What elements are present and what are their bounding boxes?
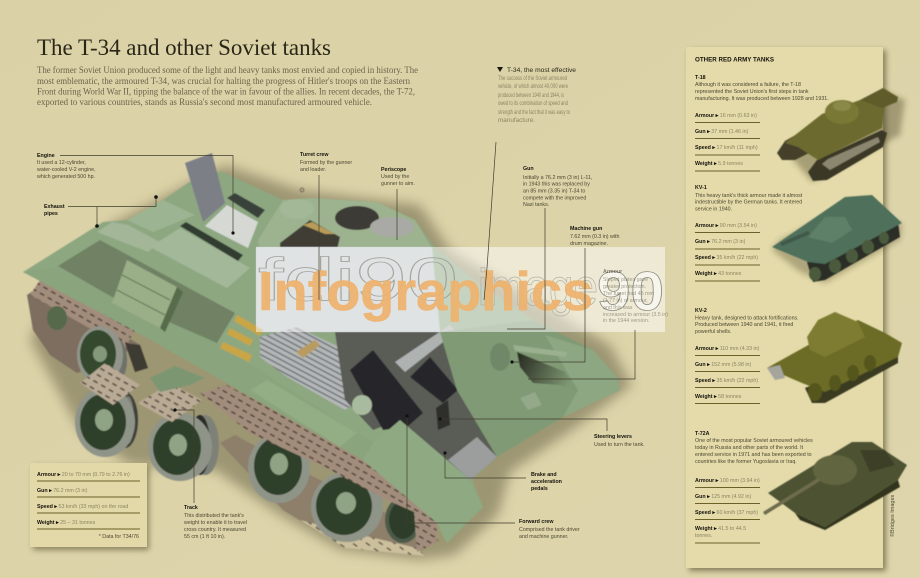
label: exhaust pipes: Exhaust <box>44 204 65 210</box>
label: armour <box>603 269 668 324</box>
panel: T-34 specifications: Speed ▸ 53 km/h (33 mph) on the road <box>37 504 128 510</box>
label: track <box>173 408 247 540</box>
callout: T-34 most effective <box>484 67 576 300</box>
label: machine gun: 7.62 mm (0.3 in) with <box>570 234 620 240</box>
T-72A specs: Speed ▸ 60 km/h (37 mph) <box>695 510 758 516</box>
glacis shade <box>517 352 578 392</box>
T-72A specs: today in Russia and other parts of the world. It <box>695 445 804 451</box>
label: brake and acceleration pedals: Brake and <box>531 472 557 478</box>
T-18 specs: Armour ▸ 16 mm (0.63 in) <box>695 113 757 119</box>
engine deck centre <box>150 228 250 288</box>
gold plate <box>296 340 320 358</box>
T-72A specs <box>695 431 813 543</box>
seat <box>350 350 423 430</box>
upper track <box>200 385 437 552</box>
label: track: This distributed the tank's <box>184 513 244 519</box>
T-18 specs: Although it was considered a failure, the T-18 <box>695 82 801 88</box>
label: gun: Initially a 76.2 mm (3 in) L-11, <box>523 175 592 181</box>
wheel 3 <box>148 413 219 481</box>
turret interior <box>256 247 440 332</box>
T-18 specs: Gun ▸ 37 mm (1.46 in) <box>695 129 749 135</box>
label: machine gun <box>510 226 620 364</box>
label: gun: compete with the improved <box>523 196 586 202</box>
T-18 specs <box>695 75 829 171</box>
T-18 specs: Weight ▸ 5.9 tonnes <box>695 161 743 167</box>
label: machine gun: drum magazine. <box>570 241 608 247</box>
engine deck rear <box>127 200 195 232</box>
silver cylinders <box>448 437 497 480</box>
KV-2 specs <box>695 308 799 404</box>
intro text: most emblematic, the armoured T-34, was crucial for halting the progress of Hitler's troops on the Eastern <box>37 76 410 87</box>
glacis <box>440 320 620 457</box>
credit: ©Bridges Images <box>889 494 896 537</box>
label: engine: It used a 12-cylinder, <box>37 160 86 166</box>
label: armour: in the 1944 version. <box>603 318 649 324</box>
turret opening <box>280 220 340 250</box>
KV-2 specs: Speed ▸ 35 km/h (22 mph) <box>695 378 758 384</box>
leader: armour <box>528 330 635 379</box>
main tank illustration: T-34 cutaway <box>23 153 632 560</box>
label: engine: water-cooled V-2 engine, <box>37 167 96 173</box>
label: steering levers: Used to turn the tank. <box>594 442 645 448</box>
label: brake and acceleration pedals: acceleration <box>531 479 562 485</box>
T-72A specs: Gun ▸ 125 mm (4.92 in) <box>695 494 751 500</box>
KV-1 specs: service in 1940. <box>695 206 732 212</box>
label: engine <box>37 153 235 235</box>
marker triangle <box>497 67 503 72</box>
label: brake and acceleration pedals <box>443 451 562 492</box>
KV-2 tank illustration <box>767 312 902 403</box>
T-72A tank illustration <box>763 442 907 530</box>
label: turret crew: and loader. <box>300 167 326 173</box>
callout body: The success of the Soviet armoured <box>498 76 567 82</box>
dome <box>280 199 314 219</box>
callout body: manufacture. <box>498 118 535 124</box>
label: armour: (1.77 in) of armour, <box>603 298 648 304</box>
label: track: cross country. It measured <box>184 527 246 533</box>
KV-1 specs <box>695 185 803 281</box>
intro text: The former Soviet Union produced some of the light and heavy tanks most envied and copied in history. The <box>37 65 418 76</box>
hull silhouette <box>23 172 620 543</box>
KV-2 specs: Armour ▸ 110 mm (4.33 in) <box>695 346 760 352</box>
watermark text: 90 <box>597 260 664 322</box>
label: periscope <box>381 167 415 240</box>
watermark text: fdi90 <box>258 246 458 313</box>
callout body: vehicle, of which almost 40,000 were <box>498 84 568 90</box>
callout body <box>498 76 570 124</box>
T-72A specs: One of the most popular Soviet armoured vehicles <box>695 438 813 444</box>
KV-2 specs: KV-2 <box>695 308 707 314</box>
KV-1 specs: KV-1 <box>695 185 707 191</box>
KV-1 specs: Gun ▸ 76.2 mm (3 in) <box>695 239 746 245</box>
KV-1 specs: indestructible by the German tanks. It entered <box>695 200 802 206</box>
label: turret crew: Formed by the gunner <box>300 160 352 166</box>
side plate <box>58 240 235 343</box>
label: brake and acceleration pedals: pedals <box>531 486 548 492</box>
label: gun: Gun <box>523 166 534 172</box>
label: turret crew: Turret crew <box>300 152 329 158</box>
rounded rear cover <box>97 222 160 252</box>
label: engine: Engine <box>37 153 55 159</box>
label: engine: which generated 500 hp. <box>37 174 95 180</box>
label: exhaust pipes <box>44 195 158 228</box>
ground shadow <box>30 165 632 560</box>
steering levers <box>436 400 450 430</box>
wheel 5 <box>311 472 383 542</box>
label: machine gun: Machine gun <box>570 226 602 232</box>
open hatch <box>185 153 225 222</box>
T-18 specs: T-18 <box>695 75 706 81</box>
panel: T-34 specifications: Armour ▸ 20 to 70 mm (0.79 to 2.76 in) <box>37 472 130 478</box>
intro text: Front during World War II, tipping the balance of the war in favour of the allies. In recent decades, the T-72, <box>37 86 415 98</box>
KV-2 specs: Produced between 1940 and 1941, it fired <box>695 322 793 328</box>
label: armour: increased to armour (3.5 in) <box>603 312 668 318</box>
callout body: strength and the fact that it was easy to <box>498 110 570 116</box>
turret top <box>258 198 433 250</box>
KV-2 specs: Heavy tank, designed to attack fortifications. <box>695 316 799 322</box>
T-72A specs: countries like the former Yugoslavia or Iraq. <box>695 459 797 465</box>
T-72A specs: T-72A <box>695 431 710 437</box>
T-18 specs: manufacturing. It was produced between 1928 and 1931. <box>695 96 829 102</box>
T-72A specs: tonnes. <box>695 533 712 539</box>
panel: T-34 specifications: * Data for T34/76 <box>99 534 139 540</box>
front idler <box>385 497 421 543</box>
watermark text: Infographics <box>258 260 593 322</box>
label: turret crew <box>300 152 352 300</box>
watermark text <box>258 246 664 322</box>
intro text <box>37 65 418 108</box>
watermark text: image <box>478 259 598 317</box>
wheel 2 <box>75 387 138 457</box>
ribbed floor <box>260 327 368 410</box>
suspension detail <box>150 366 205 392</box>
panel: T-34 specifications: Weight ▸ 25 – 31 tonnes <box>37 520 96 526</box>
KV-1 tank illustration <box>772 195 902 283</box>
panel: T-34 specifications: Gun ▸ 76.2 mm (3 in) <box>37 488 88 494</box>
ground track lower <box>220 435 440 553</box>
label: exhaust pipes: pipes <box>44 211 58 217</box>
louvres <box>180 222 243 261</box>
label: track: weight to enable it to travel <box>184 520 247 526</box>
leader line <box>484 142 496 300</box>
label: steering levers: Steering levers <box>594 434 632 440</box>
KV-1 specs: Armour ▸ 90 mm (3.54 in) <box>695 223 757 229</box>
label: gun: Nazi tanks. <box>523 202 549 208</box>
periscope <box>370 217 414 237</box>
KV-2 specs: powerful shells. <box>695 329 732 335</box>
T-72A specs: entered service in 1971 and has been exported to <box>695 452 812 458</box>
label: armour: greater protection. <box>603 284 646 290</box>
turret basket frame <box>395 325 456 372</box>
antenna ring <box>300 188 304 192</box>
callout body: owed to its combination of speed and <box>498 101 568 107</box>
panel: other Red Army tanks <box>686 47 907 571</box>
T-18 specs: represented the Soviet Union's first steps in tank <box>695 89 809 95</box>
gun barrel <box>513 345 567 357</box>
callout body: produced between 1940 and 1944, is <box>498 93 564 99</box>
label: periscope: gunner to aim. <box>381 181 415 187</box>
front hull plate <box>363 420 483 543</box>
intro text: exported to various countries, stands as Russia's second most manufactured armoured vehicle. <box>37 97 372 108</box>
label: periscope: Periscope <box>381 167 406 173</box>
callout heading: T-34, the most effective <box>507 67 576 74</box>
hatch opening <box>335 206 379 230</box>
nose <box>545 335 620 417</box>
title: The T-34 and other Soviet tanks <box>37 35 331 60</box>
upper louvres <box>227 193 265 218</box>
stowage box <box>112 260 183 332</box>
label: armour: Armour <box>603 269 622 275</box>
T-72A specs: Weight ▸ 41.5 to 44.5 <box>695 526 746 532</box>
label: forward crew: and machine gunner. <box>519 534 568 540</box>
rear wheels <box>47 306 148 384</box>
KV-2 specs: Weight ▸ 58 tonnes <box>695 394 742 400</box>
label: track: 55 cm (1 ft 10 in). <box>184 534 225 540</box>
label: armour: The turret had 45 mm <box>603 291 655 297</box>
engine bay silver <box>205 205 258 248</box>
wheel 4 <box>248 433 310 503</box>
gun mount <box>490 343 510 371</box>
T-18 tank illustration <box>777 88 905 182</box>
gold stripes <box>303 222 335 234</box>
label: forward crew <box>405 414 580 540</box>
KV-1 specs: This heavy tank's thick armour made it almost <box>695 193 803 199</box>
KV-2 specs: Gun ▸ 152 mm (5.98 in) <box>695 362 751 368</box>
rear upper track <box>30 278 135 348</box>
label: track: Track <box>184 505 198 511</box>
shells <box>220 315 263 362</box>
T-18 specs: Speed ▸ 17 km/h (11 mph) <box>695 145 758 151</box>
side rail box <box>250 380 357 447</box>
road wheels <box>75 387 421 543</box>
interior floor <box>335 332 497 480</box>
KV-1 specs: Weight ▸ 43 tonnes <box>695 271 742 277</box>
label: forward crew: Forward crew <box>519 519 554 525</box>
fender strip <box>23 267 373 460</box>
panel: T-34 specifications <box>30 463 149 550</box>
label: gun: in 1943 this was replaced by <box>523 182 590 188</box>
T-72A specs: Armour ▸ 100 mm (3.94 in) <box>695 478 760 484</box>
panel heading: OTHER RED ARMY TANKS <box>695 56 774 64</box>
watermark band <box>256 247 665 332</box>
label: steering levers <box>438 417 645 448</box>
label: armour: Sloped plates gave <box>603 277 648 283</box>
label: periscope: Used by the <box>381 174 409 180</box>
seat right <box>410 357 458 403</box>
KV-1 specs: Speed ▸ 35 km/h (22 mph) <box>695 255 758 261</box>
label: forward crew: Comprised the tank driver <box>519 527 580 533</box>
round fitting <box>352 395 372 415</box>
loose track sections <box>80 363 202 422</box>
hatch <box>520 392 542 410</box>
label: gun <box>507 166 592 329</box>
label: gun: an 85 mm (3.35 in) T-34 to <box>523 188 585 194</box>
rear ground track <box>27 285 140 373</box>
label: armour: and this was <box>603 305 633 311</box>
